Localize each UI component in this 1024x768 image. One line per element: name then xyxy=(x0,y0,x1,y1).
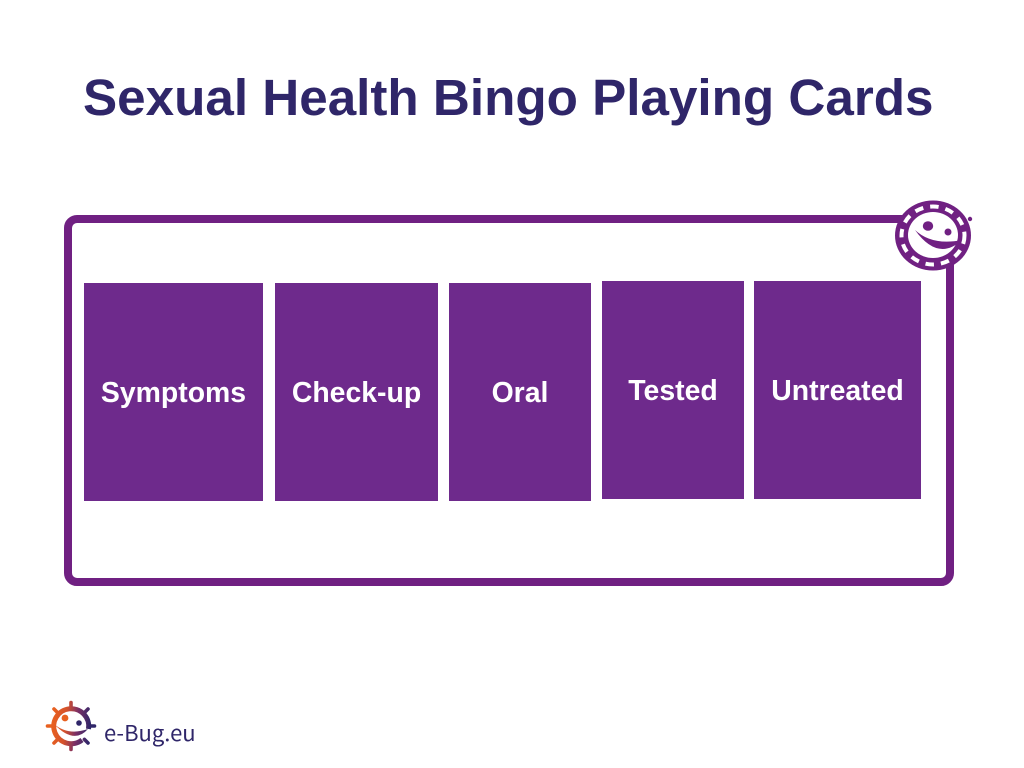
card: Tested: Tested xyxy=(628,375,718,407)
icon: e-Bug sun face xyxy=(46,700,96,752)
panel: card frame xyxy=(64,215,954,586)
card: Oral: Oral xyxy=(492,377,548,409)
title: Sexual Health Bingo Playing Cards xyxy=(83,69,934,126)
card: Oral xyxy=(449,283,591,501)
logo text: e-Bug.eu xyxy=(104,716,196,748)
logo: e-Bug xyxy=(46,700,196,752)
card: Symptoms xyxy=(84,283,263,501)
icon: smiling bug badge xyxy=(895,200,972,270)
card: Untreated xyxy=(754,281,921,499)
card: Check-up: Check-up xyxy=(292,377,421,409)
card: Symptoms: Symptoms xyxy=(101,377,246,409)
card: Check-up xyxy=(275,283,438,501)
card: Tested xyxy=(602,281,744,499)
ring and spikes xyxy=(48,702,94,750)
card: Untreated: Untreated xyxy=(771,375,904,407)
